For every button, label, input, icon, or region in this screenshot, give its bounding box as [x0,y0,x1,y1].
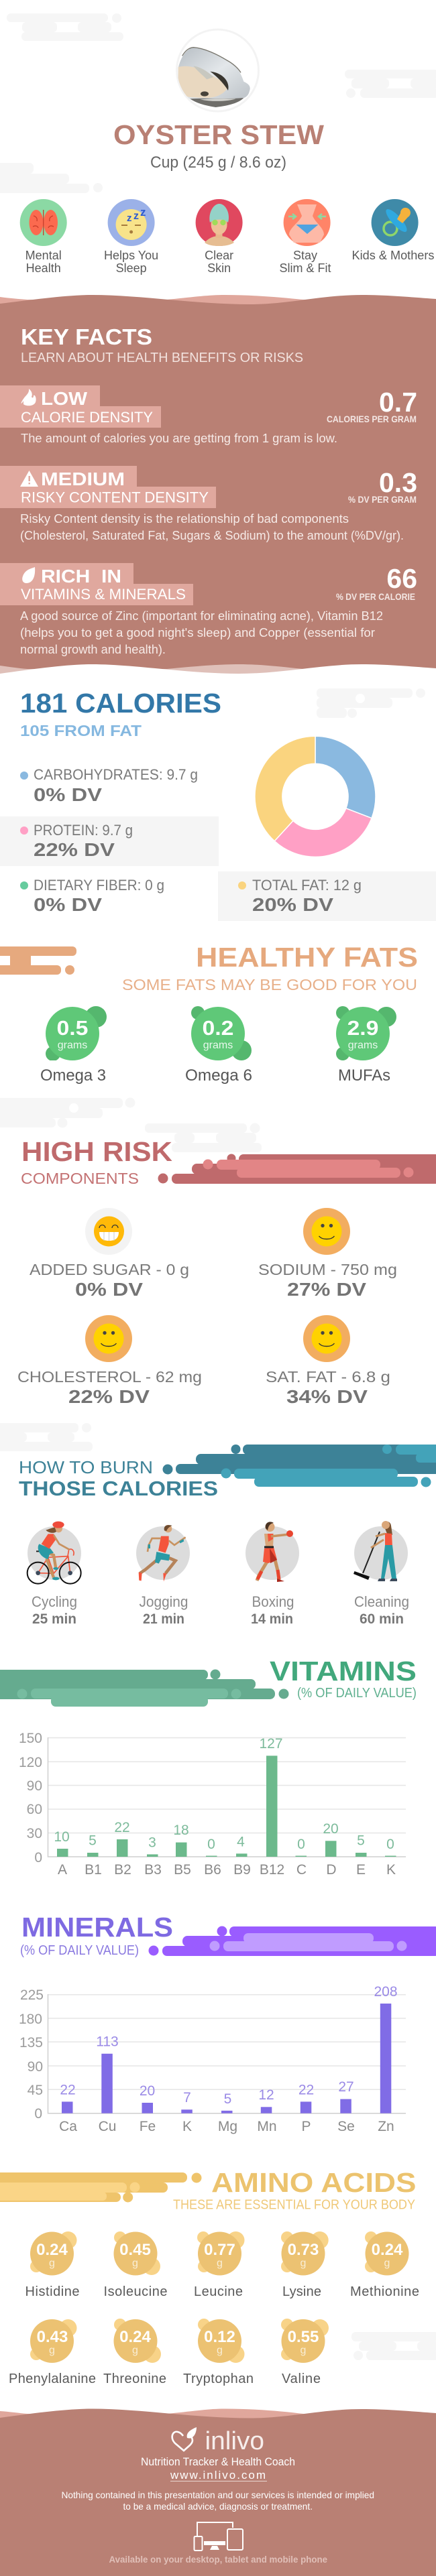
label: helps you sleep: Helps You [104,249,158,262]
disclaimer [62,2490,374,2512]
amino: leucine [194,2231,244,2299]
subheading: (% OF DAILY VALUE) [20,1943,139,1958]
banner [0,385,161,428]
bar chart: minerals: Zn [378,2119,394,2134]
logo: wordmark: inlivo [205,2427,264,2455]
panel: high risk components [17,1136,436,1407]
bar chart: vitamins: 120 [19,1755,42,1770]
panel: key facts [0,295,436,681]
description: Risky Content density is the relationship of bad components [20,512,349,526]
heading: AMINO ACIDS [211,2167,416,2198]
bar chart: minerals: 45 [28,2083,43,2098]
activity: boxing: 14 min [251,1611,293,1627]
legend: dietary fiber: 0% DV [34,894,102,915]
subheading: (% OF DAILY VALUE) [297,1686,417,1701]
bar chart: vitamins: 127 [259,1736,283,1752]
bar chart: vitamins: C [296,1862,307,1878]
background cloud: above high risk right [145,1123,262,1152]
item: sodium: 27% DV [287,1279,366,1300]
amino: histidine: g [49,2258,55,2269]
bar chart: vitamins: 10 [54,1829,70,1845]
bar chart: minerals: 135 [19,2035,43,2050]
background cloud: above high risk left [0,1098,135,1127]
item: sodium [258,1208,397,1300]
bar chart: vitamins: B5 [174,1862,191,1878]
legend: protein: PROTEIN: 9.7 g [34,822,133,839]
subheading: LEARN ABOUT HEALTH BENEFITS OR RISKS [21,351,303,365]
bar chart: minerals: Mn [257,2119,277,2134]
bar chart: vitamins: 0 [297,1837,305,1852]
unit: % DV PER GRAM [348,494,417,505]
title: OYSTER STEW [113,119,324,150]
bar chart: minerals: 12 [258,2087,274,2103]
label: CALORIE DENSITY [21,409,153,426]
bar chart: vitamins: 60 [27,1802,42,1817]
subheading: from fat: 105 FROM FAT [20,722,142,739]
item: saturated fat: 34% DV [286,1386,368,1407]
bar chart: vitamins: 5 [357,1833,365,1849]
food photo: oyster [177,29,259,111]
panel background [0,295,436,678]
amino: threonine [103,2319,166,2386]
heading: calories: 181 CALORIES [20,688,221,719]
label: mental health: Mental [25,249,62,262]
badge: omega 6: Omega 6 [185,1066,252,1085]
item: cholesterol: 22% DV [68,1386,150,1407]
value: 0.3 [379,467,417,498]
bar chart: vitamins: 5 [89,1833,97,1849]
badge: omega 6: grams [203,1040,233,1051]
description [20,609,383,656]
bar chart: vitamins: 4 [237,1834,245,1850]
legend row highlight: protein [0,816,219,866]
badge: omega 3 [40,1006,107,1085]
amino: threonine: 0.24 [119,2328,152,2346]
heading: VITAMINS [270,1656,417,1686]
panel: minerals [19,1912,436,2134]
activity: jogging [136,1525,190,1627]
background cloud: top right [345,70,436,98]
background cloud [351,2332,436,2360]
heading: MINERALS [21,1912,173,1943]
bar chart: vitamins: 20 [323,1821,339,1837]
description [20,512,404,542]
value: 66 [386,563,417,594]
legend: protein [20,822,133,860]
bar chart: minerals: 0 [34,2106,42,2122]
activity: cleaning: Cleaning [354,1593,409,1610]
label: kids and mothers: Kids & Mothers [351,249,435,262]
amino: isoleucine [103,2231,168,2299]
activity: cycling: 25 min [32,1611,76,1627]
amino: valine: g [301,2345,306,2356]
panel: amino acids [0,2167,436,2386]
bar chart: minerals: K [182,2119,192,2134]
icon: flame [21,389,36,406]
bar chart: vitamins: 30 [27,1826,42,1841]
amino: phenylalanine: Phenylalanine [9,2372,96,2386]
amino: isoleucine: Isoleucine [103,2284,168,2299]
logo: heart and leaf [172,2427,197,2451]
amino: tryptophan: g [217,2345,223,2356]
activity: cleaning: 60 min [360,1611,404,1627]
label: helps you sleep: Sleep [116,261,147,275]
legend: dietary fiber: DIETARY FIBER: 0 g [34,877,164,894]
badge: mufas [336,1006,396,1085]
legend row highlight: total fat [218,871,436,921]
heading: HIGH RISK [21,1136,172,1167]
bar chart: minerals: 22 [60,2082,76,2098]
activity: cycling [28,1522,81,1627]
badge: omega 6 [185,1006,252,1085]
rating: RICH IN [41,566,121,587]
amino: threonine: g [132,2345,138,2356]
badge: omega 3: 0.5 [56,1016,89,1040]
legend: carbohydrates: CARBOHYDRATES: 9.7 g [34,766,198,783]
bar chart: vitamins: 18 [173,1823,189,1838]
amino: lysine: Lysine [282,2284,321,2299]
amino: valine: Valine [282,2372,321,2386]
amino: methionine: 0.24 [372,2241,403,2259]
amino: methionine [350,2231,419,2299]
amino: leucine: Leucine [194,2284,243,2299]
bar chart: vitamins: 0 [207,1837,215,1852]
footer background [0,2409,436,2576]
item: added sugar [30,1208,189,1300]
subheading: COMPONENTS [21,1170,139,1187]
bar chart: minerals: 90 [28,2059,43,2075]
decorative cloud [0,946,76,975]
bar chart: vitamins: 150 [19,1731,42,1746]
icon: helps you sleep: z [140,206,146,219]
bar chart: minerals: Ca [59,2119,77,2134]
rating: LOW [41,388,88,409]
bar chart: vitamins: 22 [114,1820,130,1835]
panel: calories [0,688,436,921]
bar chart: minerals: 113 [96,2034,119,2050]
amino: histidine: 0.24 [36,2241,68,2259]
label: stay slim and fit: Slim & Fit [279,261,331,275]
icon: helps you sleep: z [127,212,131,224]
amino: isoleucine: 0.45 [119,2241,151,2259]
subheading: SOME FATS MAY BE GOOD FOR YOU [122,976,417,993]
bar chart: minerals: 208 [374,1984,398,2000]
decorative cloud [0,2172,201,2203]
activity: jogging: Jogging [140,1593,188,1610]
amino: tryptophan: 0.12 [204,2328,235,2346]
activity: boxing [246,1522,299,1627]
item: sodium: SODIUM - 750 mg [258,1261,397,1278]
bar chart: vitamins: B1 [85,1862,102,1878]
value: 0.7 [379,387,417,418]
legend: total fat: TOTAL FAT: 12 g [252,877,362,894]
amino: tryptophan [183,2319,254,2386]
bar chart: vitamins: B9 [233,1862,251,1878]
heading line 2: THOSE CALORIES [19,1477,218,1500]
disclaimer: to be a medical advice, diagnosis or treatment. [123,2501,313,2512]
amino: phenylalanine [9,2319,96,2386]
unit: % DV PER CALORIE [336,591,415,602]
icon: mental health brain [20,199,67,246]
wave: bottom edge [0,664,436,680]
bar chart: minerals: 7 [183,2090,191,2105]
amino: lysine [281,2231,329,2299]
bar chart: minerals: 27 [338,2079,354,2095]
bar chart: minerals: P [301,2119,311,2134]
bar chart: vitamins: 0 [34,1850,42,1865]
amino: leucine: g [217,2258,223,2269]
banner [0,466,216,508]
amino: leucine: 0.77 [204,2241,235,2259]
banner [0,563,193,605]
panel: how to burn those calories [19,1445,436,1627]
badge: omega 6: 0.2 [203,1016,233,1040]
donut chart [255,736,376,857]
legend: dietary fiber [20,877,164,915]
amino: phenylalanine: g [49,2345,55,2356]
bar chart: vitamins: K [386,1862,396,1878]
legend: carbohydrates [20,766,198,805]
legend: protein: 22% DV [34,839,115,860]
item: saturated fat: SAT. FAT - 6.8 g [266,1368,390,1386]
legend: total fat: 20% DV [252,894,333,915]
activity: jogging: 21 min [143,1611,184,1627]
benefits row [20,199,434,275]
bar chart: vitamins: B12 [260,1862,284,1878]
heading: HEALTHY FATS [196,942,418,973]
background cloud [317,688,425,718]
badge: mufas: grams [348,1040,378,1051]
icon: leaf [22,567,35,583]
serving size: Cup (245 g / 8.6 oz) [150,154,286,172]
fact: low calorie density [0,385,417,445]
decorative cloud [149,1926,436,1956]
amino: tryptophan: Tryptophan [183,2372,254,2386]
bar chart: vitamins: D [326,1862,337,1878]
icon: stay slim and fit [284,199,331,246]
availability note: Available on your desktop, tablet and mobile phone [109,2554,327,2565]
icon: devices [195,2522,243,2551]
label: mental health: Health [26,261,61,275]
tagline: Nutrition Tracker & Health Coach [141,2455,295,2468]
fact: rich in vitamins and minerals [0,563,417,656]
bar chart: vitamins [19,1731,406,1878]
amino: histidine: Histidine [25,2284,79,2299]
icon: clear skin [196,199,243,246]
icon: kids and mothers [372,199,419,246]
description: (Cholesterol, Saturated Fat, Sugars & Sodium) to the amount (%DV/gr). [20,529,404,542]
bar chart: minerals: 225 [20,1987,44,2003]
legend: total fat [238,877,362,915]
label: VITAMINS & MINERALS [21,586,186,603]
bar chart: minerals: Cu [99,2119,116,2134]
amino: methionine: g [384,2258,390,2269]
amino: histidine [25,2231,79,2299]
amino: threonine: Threonine [103,2372,166,2386]
bar chart: vitamins: E [356,1862,366,1878]
item: added sugar: ADDED SUGAR - 0 g [30,1261,189,1278]
wave: back layer [0,2409,436,2427]
legend: carbohydrates: 0% DV [34,784,102,805]
description: A good source of Zinc (important for eliminating acne), Vitamin B12 [20,609,383,623]
bar chart: minerals: Se [337,2119,355,2134]
panel: vitamins [0,1656,417,1878]
disclaimer: Nothing contained in this presentation and our services is intended or implied [62,2490,374,2500]
background cloud: top left [7,13,123,41]
decorative cloud [0,1669,288,1707]
amino: methionine: Methionine [350,2284,419,2299]
bar chart: minerals: Fe [140,2119,156,2134]
amino: lysine: 0.73 [288,2241,319,2259]
bar chart: vitamins: A [58,1862,67,1878]
icon: warning triangle [20,471,38,487]
subheading: THESE ARE ESSENTIAL FOR YOUR BODY [173,2197,415,2212]
label: clear skin: Skin [207,261,231,275]
panel: healthy fats [0,942,418,1085]
bar chart: vitamins: B3 [144,1862,162,1878]
amino: phenylalanine: 0.43 [37,2328,68,2346]
item: cholesterol: CHOLESTEROL - 62 mg [17,1368,202,1386]
description: (helps you to get a good night's sleep) and Copper (essential for [20,626,375,639]
decorative cloud [162,1445,436,1487]
bar chart: minerals [19,1984,406,2134]
unit: CALORIES PER GRAM [327,414,417,424]
heading: key facts: KEY FACTS [21,324,152,349]
wave: white cut [0,664,436,681]
bar chart: minerals: 5 [224,2091,231,2107]
fact: medium risky content density [0,466,417,542]
icon: helps you sleep: z [133,210,139,222]
badge: omega 3: Omega 3 [40,1066,106,1085]
badge: omega 3: grams [58,1040,87,1051]
label: clear skin: Clear [205,249,233,262]
amino: lysine: g [301,2258,306,2269]
description: normal growth and health). [20,643,166,656]
background cloud: above burn section [0,1423,93,1451]
label: RISKY CONTENT DENSITY [21,489,209,505]
bar chart: vitamins: B2 [114,1862,131,1878]
badge: mufas: MUFAs [338,1066,390,1085]
panel: footer [0,2409,436,2576]
rating: MEDIUM [41,469,125,489]
activity: boxing: Boxing [252,1593,294,1610]
activity: cleaning [353,1521,409,1627]
bar chart: vitamins: 90 [27,1778,42,1794]
icon: helps you sleep [108,199,155,246]
bar chart: minerals: Mg [218,2119,237,2134]
amino: isoleucine: g [132,2258,138,2269]
website link: www.inlivo.com [170,2469,266,2481]
decorative cloud [158,1154,436,1184]
item: saturated fat [266,1315,390,1407]
activity: cycling: Cycling [32,1593,77,1610]
bar chart: vitamins: 3 [148,1835,156,1850]
heading line 1: HOW TO BURN [19,1457,153,1477]
description: The amount of calories you are getting from 1 gram is low. [21,432,337,445]
amino: valine [281,2319,329,2386]
item: added sugar: 0% DV [75,1279,143,1300]
wave: top edge [0,295,436,315]
bar chart: minerals: 22 [298,2082,314,2098]
item: cholesterol [17,1315,202,1407]
background cloud: left [0,163,103,193]
label: stay slim and fit: Stay [293,249,317,262]
amino: valine: 0.55 [288,2328,319,2346]
bar chart: vitamins: 0 [386,1837,394,1852]
badge: mufas: 2.9 [347,1016,378,1040]
bar chart: vitamins: B6 [204,1862,221,1878]
bar chart: minerals: 180 [19,2012,42,2027]
bar chart: minerals: 20 [140,2083,155,2099]
